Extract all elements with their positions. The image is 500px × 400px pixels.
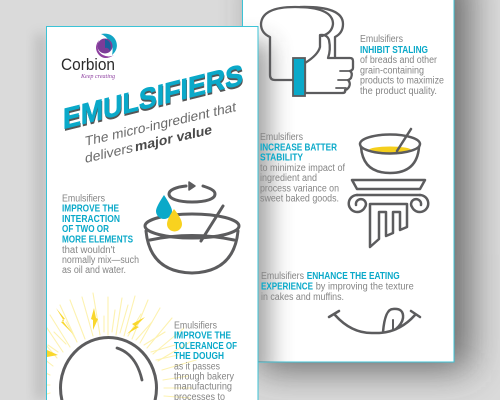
text: enhance the eating experience: ENHANCE THE EATING [307,271,400,282]
subtitle: delivers [85,140,133,166]
text: improve the tolerance: manufacturing [174,382,232,392]
text: inhibit staling [360,34,444,97]
text: improve the interaction: as oil and water. [62,265,126,276]
text: improve the interaction: INTERACTION [62,214,120,225]
icon: blue drop [156,195,172,219]
icon: batter bowl on column [349,129,428,247]
icon: logo mark [96,34,117,58]
text: increase batter stability: Emulsifiers [260,132,303,143]
text: enhance the eating experience: by improving the texture [316,282,414,292]
title: EMULSIFIERS [64,60,244,138]
text: improve the interaction: OF TWO OR [62,224,110,235]
text: improve the interaction [62,194,139,276]
subtitle: The micro-ingredient that [85,99,236,149]
text: improve the interaction: IMPROVE THE [62,204,119,214]
text: increase batter stability [260,132,345,204]
text: inhibit staling: products to maximize [360,76,444,86]
rays [35,293,196,398]
text: improve the interaction: Emulsifiers [62,194,105,204]
icon: smile with tongue [329,309,420,333]
text: improve the tolerance: Emulsifiers [174,320,217,332]
text: inhibit staling: the product quality. [360,86,437,97]
subtitle: major value [135,122,212,154]
text: increase batter stability: STABILITY [260,152,303,164]
text: enhance the eating experience: in cakes and muffins. [261,292,344,303]
text: improve the interaction: MORE ELEMENTS [62,234,133,246]
text: inhibit staling: INHIBIT STALING [360,45,428,56]
icon: mixing bowl with drops [145,182,239,273]
text: improve the tolerance: IMPROVE THE [174,330,231,342]
text: improve the tolerance [174,320,237,400]
text: improve the interaction: normally mix—such [62,255,139,266]
icon: lightning bolts [47,308,145,357]
text: increase batter stability: to minimize impact of [260,163,345,174]
logo: Corbion: Keep creating [80,74,115,80]
text: increase batter stability: INCREASE BATTER [260,142,338,154]
text: inhibit staling: Emulsifiers [360,34,403,45]
text: improve the tolerance: through bakery [174,372,234,382]
text: improve the interaction: that wouldn't [62,245,115,256]
logo: Corbion: Corbion [61,55,115,74]
text: improve the tolerance: THE DOUGH [174,351,224,362]
text: enhance the eating experience [261,271,414,303]
icon: bread thumbs up [261,7,353,96]
illustration: glowing dough ball [35,293,196,400]
logo: Corbion [61,34,117,80]
title: EMULSIFIERS [63,59,243,136]
text: inhibit staling: of breads and other [360,55,438,66]
text: increase batter stability: ingredient and [260,173,317,184]
panel: front card [35,26,258,400]
text: increase batter stability: sweet baked goods. [260,194,339,204]
text: increase batter stability: process variance on [260,184,339,194]
text: enhance the eating experience: EXPERIENCE [261,282,313,292]
text: inhibit staling: grain-containing [360,66,424,76]
panel: back card [242,0,454,362]
text: enhance the eating experience: Emulsifiers [261,271,304,282]
icon: yellow drop [167,209,182,232]
text: improve the tolerance: as it passes [174,362,220,372]
text: improve the tolerance: TOLERANCE OF [174,341,237,352]
